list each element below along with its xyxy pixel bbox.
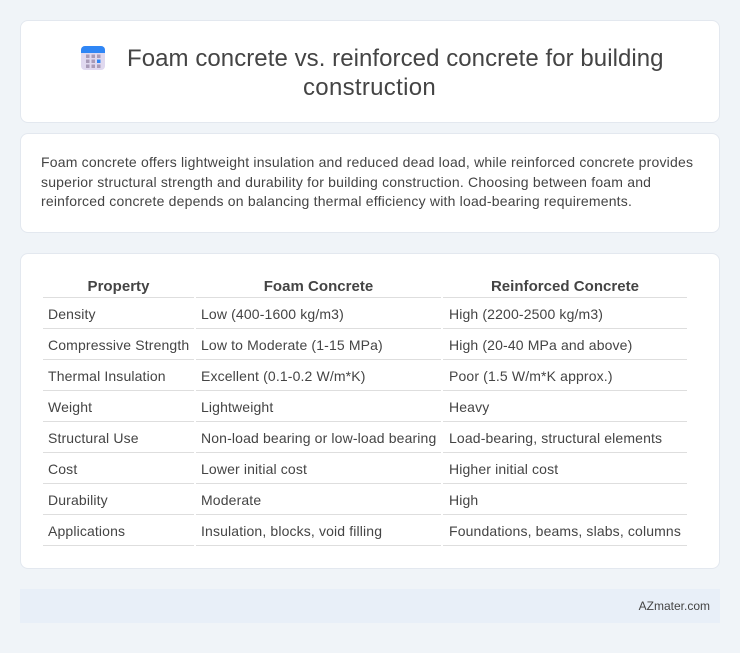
table rows: Excellent (0.1-0.2 W/m*K) <box>201 368 366 384</box>
table rows: Thermal Insulation <box>48 368 166 384</box>
text block: summary <box>41 154 693 209</box>
table rows: Low to Moderate (1-15 MPa) <box>201 337 383 353</box>
title <box>127 45 664 101</box>
footer bar <box>20 589 720 623</box>
table rows: Higher initial cost <box>449 461 558 477</box>
table header: Reinforced Concrete <box>491 278 639 295</box>
table rows: Poor (1.5 W/m*K approx.) <box>449 368 613 384</box>
icon: calendar <box>81 46 105 70</box>
table rows: Density <box>48 306 96 322</box>
table rows: High (20-40 MPa and above) <box>449 337 632 353</box>
table header: Foam Concrete <box>264 278 373 295</box>
text block: summary: reinforced concrete depends on balancing thermal efficiency with load-bearing requirements. <box>41 193 632 209</box>
panel: title card <box>20 20 720 123</box>
table rows: Lower initial cost <box>201 461 307 477</box>
text block: summary: Foam concrete offers lightweight insulation and reduced dead load, while reinforced concrete provides <box>41 154 693 170</box>
table rows: Insulation, blocks, void filling <box>201 523 382 539</box>
table rows: Heavy <box>449 399 489 415</box>
title: construction <box>303 74 436 101</box>
table rows: Lightweight <box>201 399 273 415</box>
table rows <box>43 297 687 546</box>
table rows: Foundations, beams, slabs, columns <box>449 523 681 539</box>
table rows: Weight <box>48 399 92 415</box>
table rows: Low (400-1600 kg/m3) <box>201 306 344 322</box>
text block: summary: superior structural strength and durability for building construction. Choosing between foam and <box>41 174 651 190</box>
table header: Property <box>88 278 149 295</box>
table rows: Non-load bearing or low-load bearing <box>201 430 436 446</box>
table rows: Structural Use <box>48 430 139 446</box>
table rows: High <box>449 492 478 508</box>
panel: summary <box>20 133 720 233</box>
table rows: Load-bearing, structural elements <box>449 430 662 446</box>
title: Foam concrete vs. reinforced concrete for building <box>127 45 664 72</box>
table rows: Cost <box>48 461 77 477</box>
table rows: Moderate <box>201 492 261 508</box>
table rows: High (2200-2500 kg/m3) <box>449 306 603 322</box>
table rows: Compressive Strength <box>48 337 189 353</box>
footer credit: AZmater.com <box>639 599 710 613</box>
table rows: Applications <box>48 523 125 539</box>
table header <box>88 278 639 295</box>
table rows: Durability <box>48 492 108 508</box>
panel: comparison table <box>20 253 720 569</box>
